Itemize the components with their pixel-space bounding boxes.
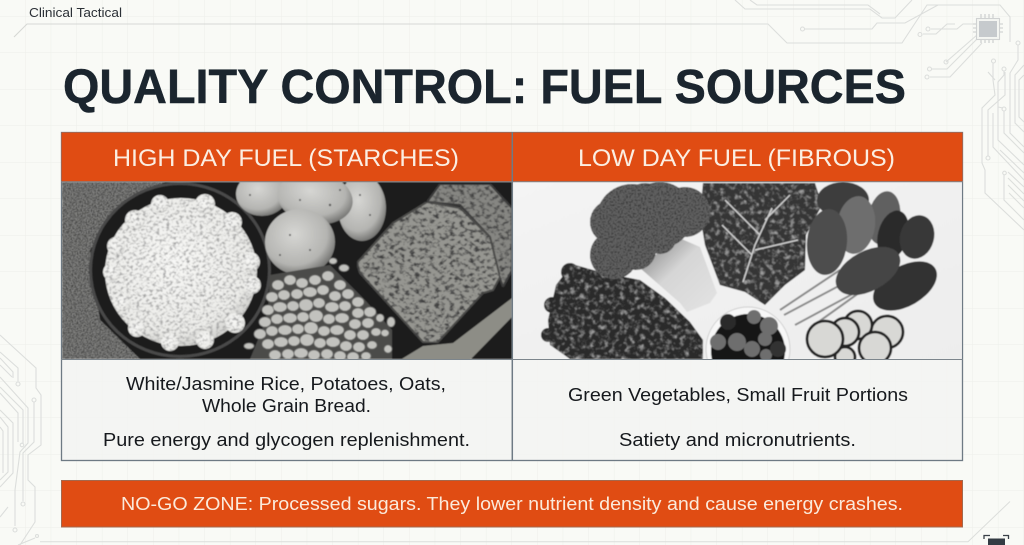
broccoli [590, 182, 717, 312]
text: fibrous foods: Green Vegetables, Small Fruit Portions [568, 384, 908, 405]
title: QUALITY CONTROL: FUEL SOURCES [63, 61, 906, 114]
text: starch foods: Pure energy and glycogen replenishment. [103, 429, 470, 450]
panel: comparison table [61, 132, 963, 461]
column: low day fuel [513, 132, 962, 450]
icon: microchip [973, 14, 1003, 43]
header: high day fuel [62, 132, 512, 182]
callout: no-go zone banner: NO-GO ZONE: Processed sugars. They lower nutrient density and cause energy crashes. [121, 493, 903, 514]
circuit traces: top right with chip [700, 0, 1010, 79]
header: low day fuel [513, 132, 962, 182]
footer rule [40, 502, 1010, 542]
photo: broccoli, greens, berries and cucumber [540, 182, 962, 359]
text: starch foods [103, 373, 470, 450]
circuit traces: right edge [982, 41, 1024, 230]
wooden spoon [400, 298, 512, 360]
text: fibrous foods: Satiety and micronutrients. [619, 429, 856, 450]
spinach [780, 182, 945, 328]
header: low day fuel: LOW DAY FUEL (FIBROUS) [578, 145, 895, 172]
cucumber slices [807, 311, 903, 367]
icon: corner frame [984, 536, 1008, 545]
text: fibrous foods [568, 384, 908, 450]
collard leaf [700, 183, 822, 305]
header rule with label [14, 5, 700, 37]
bowl of berries [705, 306, 791, 359]
circuit traces: left edge [0, 335, 41, 545]
potatoes [235, 182, 387, 273]
kale [541, 263, 703, 359]
text: starch foods: Whole Grain Bread. [202, 395, 371, 416]
bowl of rice [89, 182, 271, 358]
bread slices [357, 184, 512, 343]
potato specks [249, 189, 371, 256]
label: Clinical Tactical: Clinical Tactical [29, 5, 122, 20]
column: high day fuel [62, 132, 512, 450]
photo: rice, potatoes, oats and bread [62, 166, 512, 362]
callout: no-go zone banner [62, 480, 962, 527]
cloth [62, 182, 165, 359]
header: high day fuel: HIGH DAY FUEL (STARCHES) [113, 145, 459, 172]
oats [244, 258, 395, 362]
text: starch foods: White/Jasmine Rice, Potatoes, Oats, [126, 373, 446, 394]
